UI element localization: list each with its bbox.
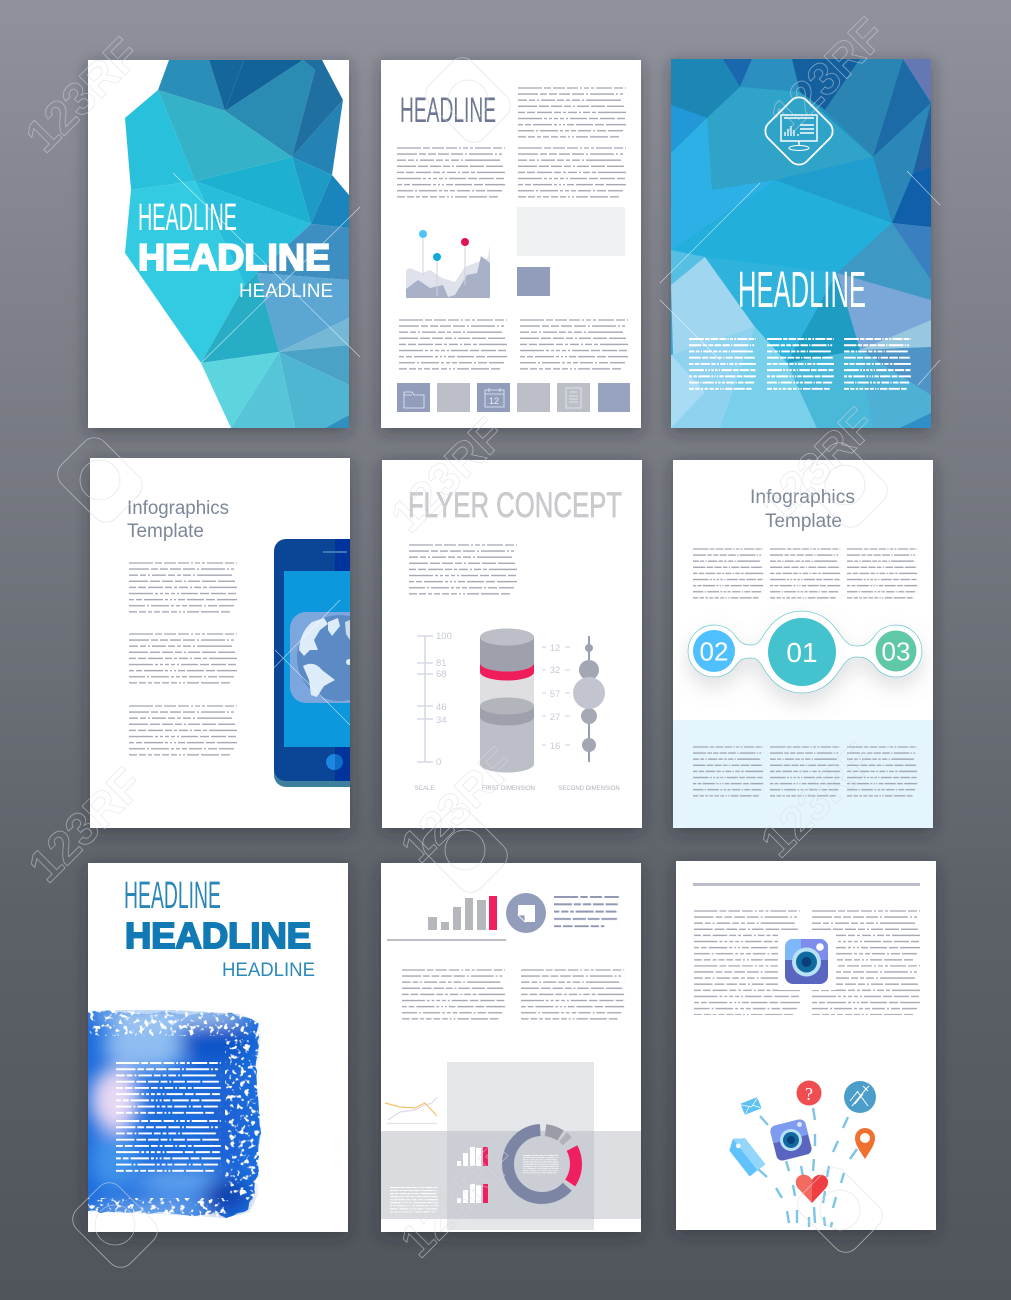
text block lower [116, 1120, 221, 1172]
text block upper [116, 1062, 221, 1114]
decorative watermark: 123RF [750, 733, 885, 867]
icon: heart [796, 1175, 828, 1203]
headline small: HEADLINE [222, 959, 315, 981]
placeholder square [517, 267, 550, 296]
top rule [693, 883, 920, 886]
text column left [694, 910, 800, 1015]
panel: flyer 7 watercolor [80, 863, 348, 1232]
icon: question: ? [805, 1084, 813, 1104]
bubble chart: 32 [550, 665, 560, 676]
panel: flyer 8 charts [381, 863, 641, 1232]
icon: cutlery [844, 1081, 876, 1113]
footer text column 2 [770, 746, 840, 797]
icon: camera large [785, 939, 828, 984]
phone with globe [274, 539, 350, 787]
panel: flyer 1 polygon cover [88, 60, 349, 428]
headline: HEADLINE [400, 91, 496, 130]
headline light: HEADLINE [124, 875, 221, 917]
grey band left [381, 1131, 447, 1219]
bubble chart: 12 [550, 643, 560, 654]
icon: mail [740, 1097, 762, 1115]
cylinder chart [480, 628, 534, 772]
text block right [521, 969, 624, 1020]
text block top right [518, 87, 626, 138]
headline bold: HEADLINE [125, 915, 311, 956]
decorative watermark: 123RF [760, 8, 895, 142]
icon: question [796, 1080, 822, 1106]
circle 03: 03 [882, 636, 910, 666]
panel: flyer 9 social icons [676, 861, 936, 1230]
icon: camera small [769, 1118, 813, 1162]
footer text column 1 [693, 746, 763, 797]
headline small: HEADLINE [239, 280, 333, 302]
panel: flyer 2 article layout [381, 60, 641, 428]
donut chart [508, 1130, 576, 1198]
text block left [397, 147, 505, 198]
heading line 2: Template [765, 511, 842, 532]
circle 02 [693, 630, 735, 672]
headline: HEADLINE [738, 261, 866, 318]
icon: map pin [855, 1128, 875, 1159]
text column 3 [847, 548, 917, 599]
axis labels: SCALE [415, 786, 434, 792]
connected circles diagram [688, 611, 922, 693]
headline bold: HEADLINE [138, 237, 330, 278]
donut centre text [523, 1155, 559, 1173]
dashed connectors [758, 1108, 857, 1227]
icon row: 12 [489, 396, 499, 406]
grey band right [594, 1131, 641, 1219]
placeholder image [517, 207, 625, 256]
heading line 2: Template [127, 521, 204, 542]
axis labels: SECOND DIMENSION [558, 786, 620, 792]
bubble chart: 27 [550, 712, 560, 723]
circle 01 [768, 618, 836, 686]
area chart with pins [406, 230, 490, 298]
heading: Infographics [750, 487, 855, 508]
heading: FLYER CONCEPT [408, 486, 622, 525]
icon: note in circle [506, 893, 546, 933]
line chart [385, 1097, 437, 1124]
polygon artwork [125, 60, 349, 428]
text column 3 [844, 338, 911, 390]
text block lower right [520, 319, 628, 370]
scale axis: 0 [436, 757, 441, 768]
panel: flyer 4 infographics with phone [90, 458, 383, 828]
grey band overlap [447, 1131, 594, 1219]
bubble chart: 57 [550, 689, 560, 700]
decorative watermark: 123RF [380, 408, 515, 542]
text block 3 [129, 705, 237, 756]
white cutout behind camera [778, 934, 836, 990]
footer text column 3 [847, 746, 917, 797]
text block right [518, 147, 626, 198]
text column right [812, 910, 920, 1015]
scale axis [417, 631, 452, 768]
axis labels: FIRST DIMENSION [482, 786, 535, 792]
panel: flyer 6 infographics with circles [673, 460, 933, 828]
scale axis: 100 [436, 631, 452, 642]
polygon artwork [671, 59, 931, 428]
icon row [397, 383, 630, 412]
bubble chart [542, 636, 605, 762]
watercolor blot [80, 1005, 265, 1218]
text column 1 [693, 548, 763, 599]
text column 2 [767, 338, 834, 390]
scale axis: 81 [436, 658, 447, 669]
decorative watermark: 123RF [390, 738, 525, 872]
header text [554, 896, 619, 930]
text block lower left [399, 319, 507, 370]
scale axis: 34 [436, 715, 447, 726]
text column 1 [689, 338, 756, 390]
circle 02: 02 [700, 636, 728, 666]
circle 03 [876, 630, 916, 672]
decorative watermark: 123RF [15, 28, 150, 162]
small white text [390, 1187, 439, 1212]
text block [409, 544, 517, 595]
white bar chart 1 [457, 1147, 488, 1166]
rule [387, 939, 506, 941]
text block 2 [129, 633, 237, 684]
panel: flyer 3 full polygon cover [671, 59, 931, 428]
decorative watermark: 123RF [750, 398, 885, 532]
icon: presentation screen in rounded diamond [761, 93, 837, 169]
icon: tag [725, 1133, 765, 1177]
bubble chart: 16 [550, 741, 560, 752]
scale axis: 46 [436, 702, 447, 713]
circle 01: 01 [786, 637, 818, 668]
grey panel [447, 1062, 594, 1230]
axis labels [415, 786, 620, 792]
panel: flyer 5 flyer concept chart [382, 460, 642, 828]
bar chart [428, 896, 497, 930]
text block left [402, 969, 505, 1020]
heading: Infographics [127, 498, 229, 519]
pale blue footer panel [673, 720, 933, 828]
white speckles along edges [88, 1006, 265, 1218]
scale axis: 68 [436, 669, 447, 680]
text column 2 [770, 548, 840, 599]
white bar chart 2 [457, 1184, 488, 1203]
headline light: HEADLINE [138, 197, 237, 239]
decorative watermark: 123RF [18, 758, 153, 892]
text block 1 [129, 562, 237, 613]
decorative watermark: 123RF [390, 1133, 525, 1267]
